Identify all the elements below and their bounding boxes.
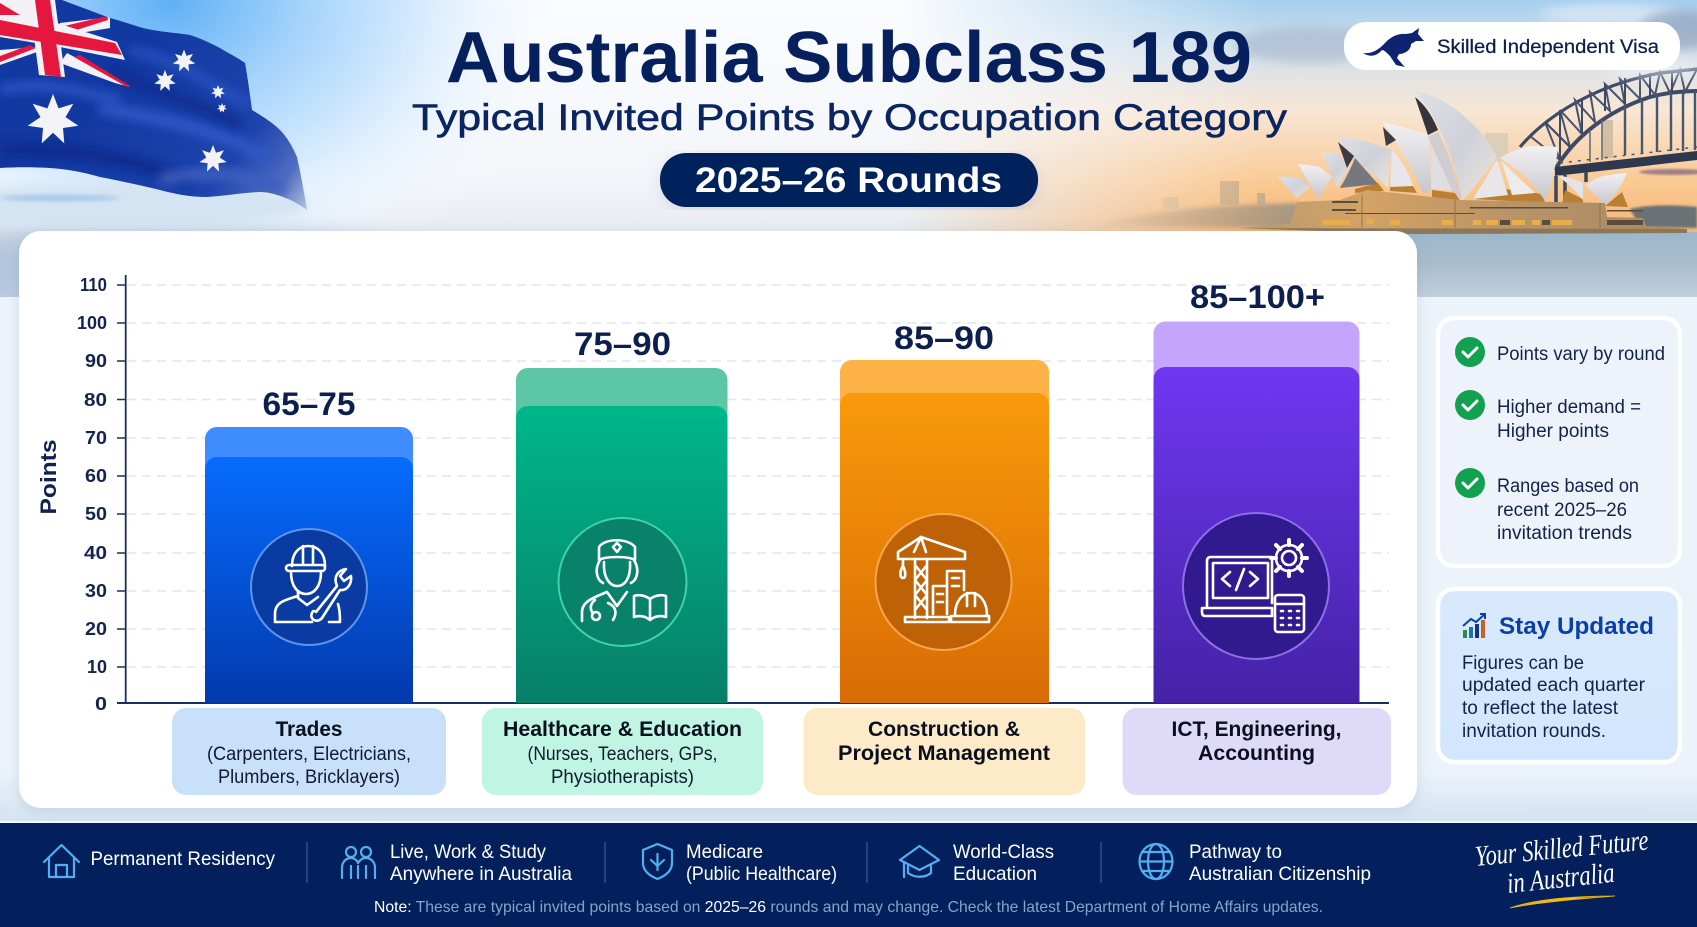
tagline	[1474, 824, 1650, 908]
bar: Healthcare & Education: 75–90	[574, 326, 671, 362]
note: points vary	[1455, 337, 1665, 367]
y axis labels: 10	[87, 657, 107, 677]
bar: ICT, Engineering, Accounting	[1154, 279, 1360, 703]
visa badge	[1344, 22, 1680, 70]
flag of Australia	[0, 0, 320, 215]
benefit: citizenship: Australian Citizenship	[1189, 863, 1371, 885]
category label: Construction & Project Management: Construction &	[868, 718, 1020, 741]
benefit: medicare: Medicare	[686, 841, 763, 863]
note: ranges: invitation trends	[1497, 523, 1632, 544]
heading: Stay Updated	[1499, 613, 1654, 640]
subtitle: Typical Invited Points by Occupation Category	[412, 97, 1288, 138]
category label: Trades: Plumbers, Bricklayers)	[218, 767, 400, 788]
footnote: Note: These are typical invited points based on 2025–26 rounds and may change. Check the latest Department of Home Affairs updates.	[374, 899, 1323, 916]
header background: sky and harbour	[0, 0, 1697, 312]
category label: Construction & Project Management	[804, 708, 1085, 795]
icon: laptop, gear and calculator	[1202, 540, 1307, 632]
benefit: live, work and study: Anywhere in Australia	[390, 863, 572, 885]
panel: chart	[19, 231, 1417, 808]
y axis labels: 90	[85, 351, 107, 371]
tagline: in Australia	[1505, 857, 1616, 900]
y axis labels: 50	[85, 504, 107, 524]
y axis labels: 80	[84, 390, 107, 410]
icon: rising chart	[1463, 614, 1485, 638]
visa badge: Skilled Independent Visa	[1437, 37, 1659, 58]
panel: stay updated	[1438, 589, 1680, 762]
icon: tradesperson with wrench	[275, 546, 351, 622]
category label: Trades: (Carpenters, Electricians,	[207, 744, 411, 765]
body text: Figures can be	[1462, 653, 1584, 674]
bar: Construction & Project Management	[840, 320, 1049, 703]
y axis labels: 100	[77, 313, 107, 333]
category label: ICT, Engineering, Accounting: ICT, Engineering,	[1172, 718, 1342, 741]
tagline: Your Skilled Future	[1474, 824, 1650, 873]
bar: Construction & Project Management: 85–90	[894, 320, 994, 356]
benefit: citizenship	[1140, 841, 1371, 885]
y axis labels	[77, 275, 107, 714]
bar: ICT, Engineering, Accounting: 85–100+	[1190, 279, 1325, 315]
benefit: permanent residency	[44, 845, 275, 877]
benefit: education: World-Class	[953, 841, 1054, 863]
benefit: medicare: (Public Healthcare)	[686, 863, 837, 885]
y axis labels: 110	[80, 275, 107, 295]
category label: ICT, Engineering, Accounting	[1122, 708, 1391, 795]
footer band	[0, 821, 1697, 927]
body text: to reflect the latest	[1462, 698, 1619, 719]
y axis labels: 0	[95, 694, 107, 714]
category label: Trades: Trades	[276, 718, 342, 741]
note: higher demand: Higher points	[1497, 421, 1609, 442]
body text: invitation rounds.	[1462, 721, 1606, 742]
benefit: live, work and study: Live, Work & Study	[390, 841, 546, 863]
year pill: 2025–26 Rounds	[695, 161, 1002, 200]
category label: Healthcare & Education: Healthcare & Education	[503, 718, 742, 741]
y axis with ticks	[117, 275, 1389, 703]
icon: nurse with book	[582, 540, 666, 621]
category label: Trades	[172, 708, 446, 795]
benefit: permanent residency: Permanent Residency	[90, 848, 275, 870]
title: Australia Subclass 189	[446, 18, 1252, 98]
category label: Construction & Project Management: Project Management	[838, 742, 1050, 765]
icon: kangaroo	[1363, 28, 1424, 67]
category label: Healthcare & Education: (Nurses, Teachers, GPs,	[528, 744, 718, 765]
y axis labels: 60	[85, 466, 107, 486]
note: higher demand	[1455, 390, 1641, 442]
bar: Healthcare & Education	[516, 326, 728, 703]
note: ranges: recent 2025–26	[1497, 500, 1627, 521]
y axis labels: 30	[85, 581, 107, 601]
y axis title: Points	[36, 440, 61, 514]
y axis labels: 70	[85, 428, 107, 448]
note: ranges	[1455, 468, 1639, 544]
category label: Healthcare & Education: Physiotherapists)	[551, 767, 694, 788]
category label: Healthcare & Education	[482, 708, 763, 795]
benefit: medicare	[643, 841, 837, 885]
y axis labels: 20	[85, 619, 107, 639]
photo: far shore right	[1630, 205, 1697, 228]
note: higher demand: Higher demand =	[1497, 397, 1641, 418]
panel: key notes	[1438, 318, 1680, 566]
year pill	[660, 153, 1038, 207]
body text: updated each quarter	[1462, 675, 1646, 696]
bar: Trades: 65–75	[262, 386, 356, 422]
benefit: education: Education	[953, 863, 1037, 885]
category label: ICT, Engineering, Accounting: Accounting	[1198, 742, 1315, 765]
glazing behind shells	[1355, 183, 1628, 207]
benefit: citizenship: Pathway to	[1189, 841, 1282, 863]
y axis labels: 40	[84, 543, 107, 563]
note: points vary: Points vary by round	[1497, 344, 1665, 365]
photo: distant Sydney skyline	[1095, 181, 1298, 228]
benefit: education	[900, 841, 1054, 885]
lower background band	[0, 770, 1697, 822]
body text	[1462, 653, 1646, 742]
union jack	[0, 0, 130, 87]
flag stars	[28, 50, 227, 172]
grid lines	[127, 285, 1389, 667]
benefit: live, work and study	[342, 841, 572, 885]
bar: Trades	[205, 386, 413, 703]
podium	[1240, 190, 1687, 234]
icon: crane, buildings and hard hat	[898, 537, 989, 622]
photo: Sydney Opera House	[1240, 90, 1687, 234]
photo: Sydney Harbour Bridge	[1520, 58, 1697, 205]
note: ranges: Ranges based on	[1497, 476, 1639, 497]
